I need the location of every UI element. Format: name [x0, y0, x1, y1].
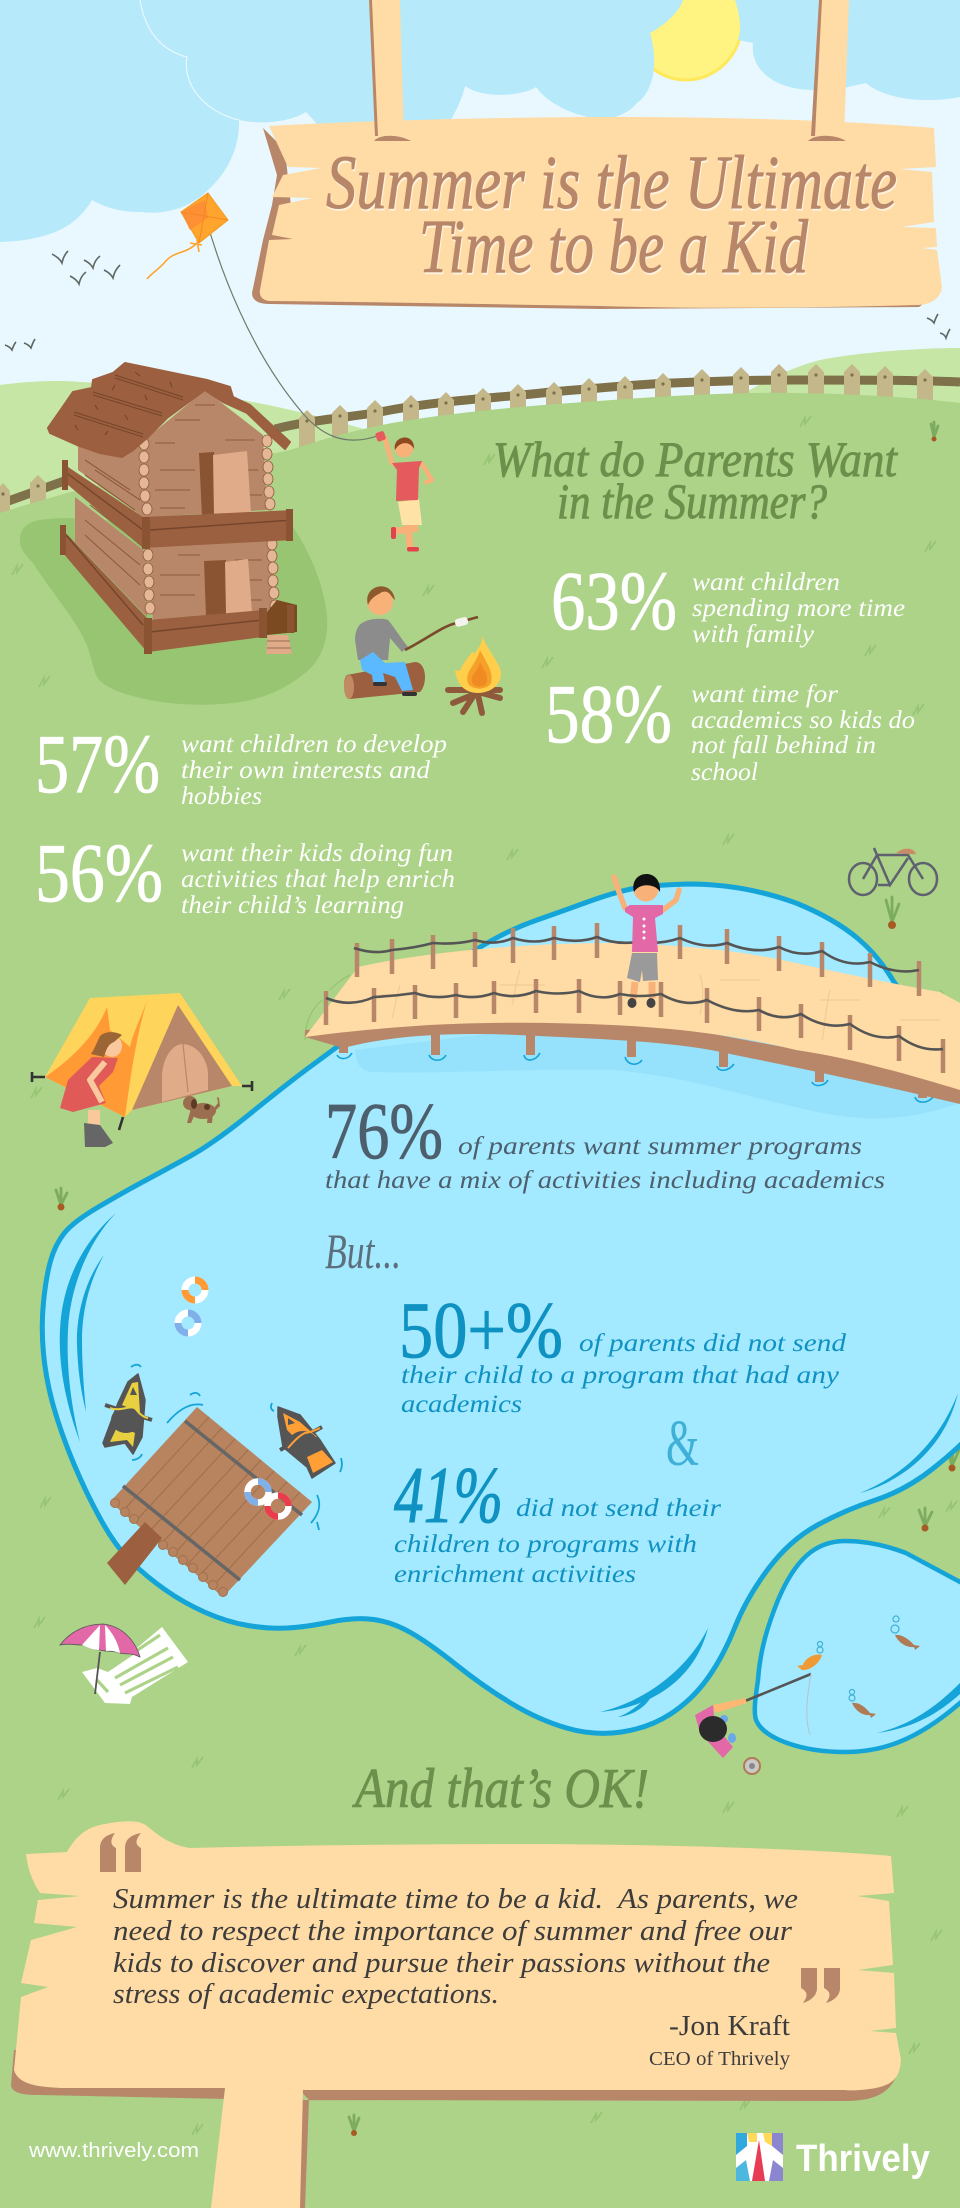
stat: 58%: academics so kids do	[691, 707, 915, 734]
text: But...: But...	[325, 1223, 401, 1279]
stat: 63%	[551, 555, 905, 648]
opening quote mark	[100, 1833, 141, 1872]
title sign	[252, 0, 942, 309]
sun	[630, 0, 742, 80]
raft	[107, 1407, 312, 1597]
logo wordmark: Thrively	[796, 2138, 930, 2180]
logo mark	[736, 2133, 783, 2181]
bridge underside	[305, 1015, 960, 1104]
lower side wall	[75, 497, 147, 617]
stat: 41%: enrichment activities	[394, 1561, 636, 1588]
roof	[48, 363, 290, 457]
girl at tent	[60, 1032, 122, 1147]
icon: orange kayak	[278, 1407, 335, 1478]
quote text: Summer is the ultimate time to be a kid. As parents, we	[113, 1884, 798, 1915]
stat: 56%: 56%	[35, 827, 163, 920]
bridge pilings	[339, 1025, 927, 1098]
sign posts	[369, 0, 404, 138]
stat: 41%: children to programs with	[394, 1531, 697, 1558]
stat: 50+%: their child to a program that had any	[401, 1362, 840, 1389]
boy on bridge	[614, 874, 679, 1008]
stat: 57%: hobbies	[181, 783, 262, 810]
stat: 76%: 76%	[325, 1088, 443, 1176]
back hills	[0, 348, 960, 560]
stat: 58%: 58%	[545, 668, 672, 761]
title: Time to be a Kid	[419, 205, 809, 289]
back rail	[354, 923, 919, 996]
icon: bicycle	[849, 848, 937, 895]
stat: 56%: want their kids doing fun	[181, 840, 453, 867]
stat: 58%: not fall behind in	[691, 732, 876, 759]
upper door	[199, 452, 214, 517]
icon: life rings	[178, 1280, 205, 1333]
heading: What do Parents Want	[493, 431, 898, 529]
icon: campfire	[448, 635, 501, 713]
title	[326, 141, 897, 289]
stat: 41%: 41%	[394, 1452, 503, 1540]
ampersand: &	[666, 1407, 699, 1480]
sign board	[260, 117, 942, 308]
stat: 50+%: academics	[401, 1391, 522, 1418]
stat: 57%: want children to develop	[181, 731, 447, 758]
stat: 63%: want children	[692, 569, 840, 596]
heading: What do Parents Want: in the Summer?	[557, 473, 827, 529]
clouds	[0, 0, 960, 242]
icon: ripples around raft	[131, 1365, 342, 1530]
tent	[32, 993, 252, 1130]
small lake	[755, 1541, 960, 1752]
closing quote mark	[801, 1968, 840, 2003]
icon: fish and bubbles	[797, 1616, 920, 1718]
dog	[183, 1096, 220, 1123]
stat: 56%: their child’s learning	[181, 892, 404, 919]
icon: kite	[147, 193, 228, 279]
stat: 58%	[545, 668, 915, 786]
log house	[48, 363, 297, 654]
fence	[0, 364, 960, 530]
attribution: -Jon Kraft	[669, 2011, 790, 2042]
stat: 63%: 63%	[551, 555, 677, 648]
stat: 50+%: of parents did not send	[579, 1330, 847, 1357]
stat: 58%: want time for	[691, 681, 838, 708]
boy with marshmallow	[344, 586, 478, 699]
grass patch under house	[20, 518, 327, 705]
upper balcony	[65, 465, 143, 548]
stat: 76%: of parents want summer programs	[458, 1133, 862, 1160]
stat: 63%: with family	[692, 621, 815, 648]
stat: 57%: their own interests and	[181, 757, 431, 784]
website url: www.thrively.com	[28, 2140, 199, 2162]
boy with kite	[375, 431, 432, 552]
log	[344, 662, 425, 699]
icon: birds	[5, 251, 950, 350]
stat: 63%: spending more time	[692, 595, 905, 622]
upper side wall	[78, 438, 147, 517]
big lake	[42, 884, 960, 1733]
sign shadow	[252, 128, 942, 309]
lower front wall	[147, 540, 273, 622]
bank tufts	[305, 975, 958, 1040]
quote text: stress of academic expectations.	[113, 1979, 499, 2010]
stat: 41%: did not send their	[516, 1495, 721, 1522]
attribution: CEO of Thrively	[649, 2048, 790, 2070]
wall planks	[85, 405, 262, 600]
kite string	[205, 215, 380, 440]
heading: What do Parents Want: What do Parents Want	[493, 431, 898, 487]
stat: 76%	[325, 1088, 885, 1194]
icon: plants	[56, 422, 959, 2136]
sky background	[0, 0, 960, 560]
stat: 41%	[394, 1452, 721, 1588]
lower balcony	[60, 527, 147, 652]
icon: yellow kayak	[103, 1374, 152, 1454]
lower door	[204, 560, 226, 617]
stat: 57%: 57%	[35, 718, 160, 811]
quote text	[113, 1884, 798, 2010]
grass ticks	[12, 416, 957, 2135]
quote text: kids to discover and pursue their passions without the	[113, 1948, 770, 1979]
lake shade and ripples	[60, 1020, 960, 1717]
quote text: need to respect the importance of summer and free our	[113, 1916, 792, 1947]
bridge	[305, 874, 960, 1104]
attribution	[649, 2011, 790, 2070]
stat: 56%: activities that help enrich	[181, 866, 455, 893]
stat: 50+%: 50+%	[399, 1287, 563, 1375]
quote sign	[11, 1821, 901, 2208]
stat: 76%: that have a mix of activities including academics	[325, 1167, 885, 1194]
sign shadow	[11, 2050, 901, 2208]
heading: And that's OK!: And that’s OK!	[351, 1758, 649, 1820]
stairs	[266, 635, 292, 654]
log ends	[139, 435, 280, 614]
porch	[267, 600, 297, 635]
stat: 56%	[35, 827, 455, 920]
icon: umbrella and deck chair	[60, 1624, 188, 1704]
fishing child	[695, 1674, 811, 1774]
front rail	[326, 979, 943, 1073]
stat: 58%: school	[691, 759, 758, 786]
sign board	[14, 1821, 901, 2208]
stick and marshmallow	[405, 617, 478, 650]
stat: 50+%	[399, 1287, 847, 1418]
bridge deck	[305, 943, 960, 1090]
stat: 57%	[35, 718, 447, 811]
ripples at pilings	[337, 1053, 934, 1102]
upper front wall	[147, 390, 267, 517]
thrively logo	[736, 2133, 930, 2181]
